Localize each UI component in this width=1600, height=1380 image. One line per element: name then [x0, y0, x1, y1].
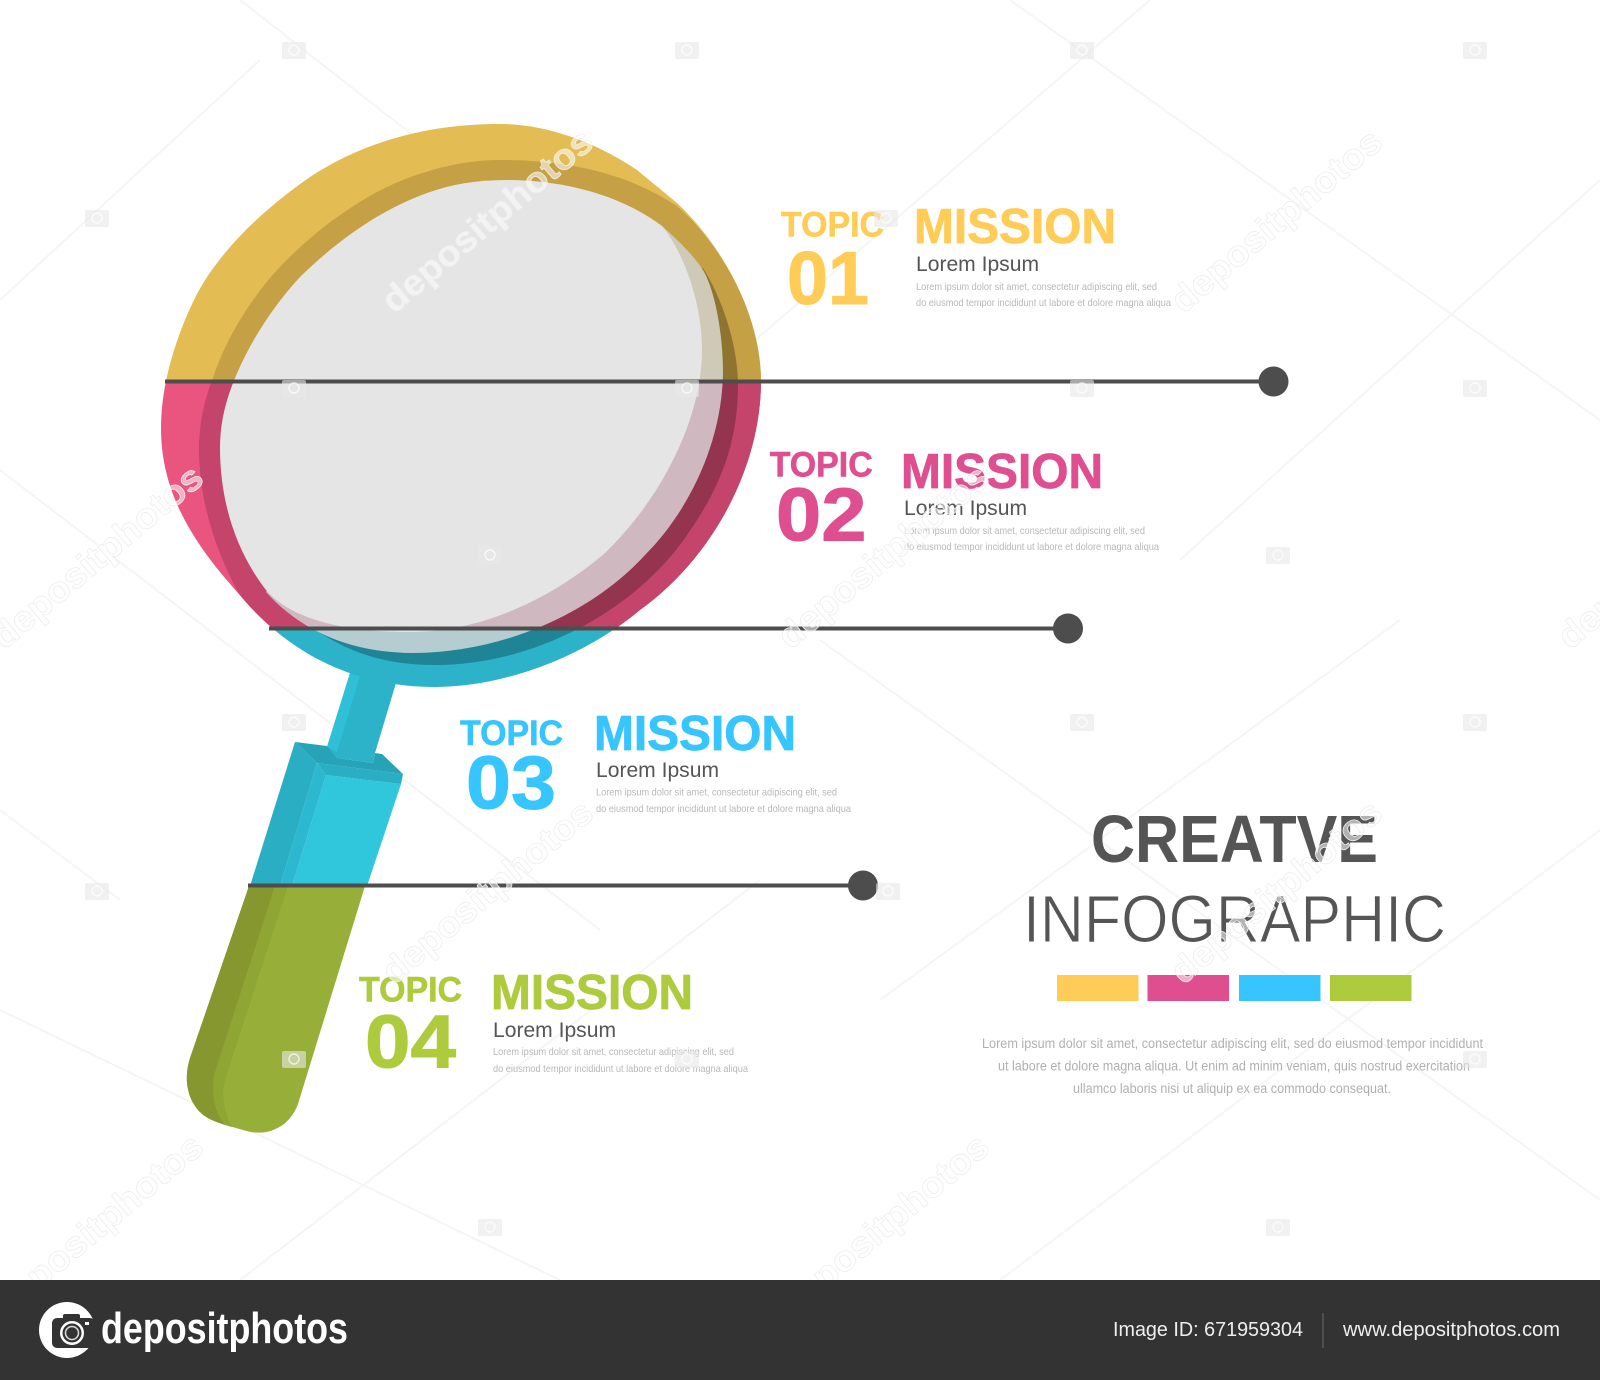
watermark text: depositphotos	[769, 1125, 997, 1326]
watermark text: depositphotos	[373, 791, 601, 992]
topic 03 block	[460, 707, 851, 824]
lens head: gold band	[166, 124, 761, 380]
topic 03 block: 03	[466, 740, 556, 824]
icon: camera logo	[39, 1302, 95, 1358]
topic 03 block: MISSION	[594, 707, 796, 761]
handle: teal section	[250, 742, 403, 886]
topic 04 block: Lorem ipsum dolor sit amet, consectetur adipiscing elit, sed	[493, 1046, 734, 1058]
lens head: teal band	[275, 630, 612, 687]
topic 02 block: do eiusmod tempor incididunt ut labore et dolore magna aliqua	[904, 541, 1159, 553]
colour swatches	[1057, 975, 1412, 1001]
website url: www.depositphotos.com	[1342, 1319, 1560, 1341]
topic 04 block: MISSION	[491, 966, 693, 1020]
description paragraph: ut labore et dolore magna aliqua. Ut enim ad minim veniam, quis nostrud exercitation	[998, 1058, 1470, 1074]
description paragraph: ullamco laboris nisi ut aliquip ex ea commodo consequat.	[1073, 1081, 1391, 1096]
lens head: pink band	[161, 384, 761, 626]
watermark text: depositphotos	[373, 120, 601, 321]
handle neck	[327, 673, 396, 763]
topic 01 block: Lorem Ipsum	[916, 253, 1039, 276]
topic 02 block	[770, 445, 1159, 556]
topic 04 block	[359, 966, 748, 1084]
topic 04 block: do eiusmod tempor incididunt ut labore et dolore magna aliqua	[493, 1063, 748, 1075]
magnifying glass	[161, 124, 761, 1133]
title: INFOGRAPHIC	[1023, 882, 1446, 957]
title	[1023, 803, 1446, 957]
topic 01 block: do eiusmod tempor incididunt ut labore et dolore magna aliqua	[916, 297, 1171, 309]
topic 04 block: 04	[365, 1000, 456, 1084]
topic 04 block: Lorem Ipsum	[493, 1019, 616, 1042]
image id: Image ID: 671959304	[1113, 1319, 1303, 1341]
topic 01 block: MISSION	[914, 200, 1116, 254]
topic 03 block: Lorem Ipsum	[596, 759, 719, 782]
watermark text: depositphotos	[769, 456, 997, 657]
topic 01 block: TOPIC	[781, 206, 884, 245]
connector line 1	[165, 366, 1288, 396]
topic 03 block: Lorem ipsum dolor sit amet, consectetur adipiscing elit, sed	[596, 787, 837, 799]
watermark stamps	[85, 42, 1487, 1236]
topic 02 block: 02	[776, 472, 866, 556]
topic 01 block: 01	[787, 236, 869, 320]
handle: green section	[187, 886, 365, 1133]
topic 03 block: do eiusmod tempor incididunt ut labore et dolore magna aliqua	[596, 803, 851, 815]
topic 03 block: TOPIC	[460, 714, 563, 753]
topic 01 block: Lorem ipsum dolor sit amet, consectetur adipiscing elit, sed	[916, 281, 1157, 293]
footer bar	[0, 1280, 1600, 1380]
topic 04 block: TOPIC	[359, 971, 462, 1010]
topic 02 block: TOPIC	[770, 446, 873, 485]
topic 01 block	[781, 200, 1171, 320]
topic 02 block: Lorem Ipsum	[904, 497, 1027, 520]
watermark text: depositphotos	[1162, 791, 1390, 992]
topic 02 block: Lorem ipsum dolor sit amet, consectetur adipiscing elit, sed	[904, 525, 1145, 537]
footer divider	[1322, 1313, 1324, 1348]
connector line 2	[269, 614, 1083, 644]
connector line 3	[248, 870, 878, 900]
description paragraph: Lorem ipsum dolor sit amet, consectetur adipiscing elit, sed do eiusmod tempor incididunt	[982, 1036, 1483, 1051]
topic 02 block: MISSION	[901, 445, 1103, 499]
watermark text: depositphotos	[1162, 120, 1390, 321]
logo wordmark: depositphotos	[101, 1304, 348, 1353]
description paragraph	[982, 1036, 1483, 1096]
title: CREATVE	[1091, 803, 1378, 877]
